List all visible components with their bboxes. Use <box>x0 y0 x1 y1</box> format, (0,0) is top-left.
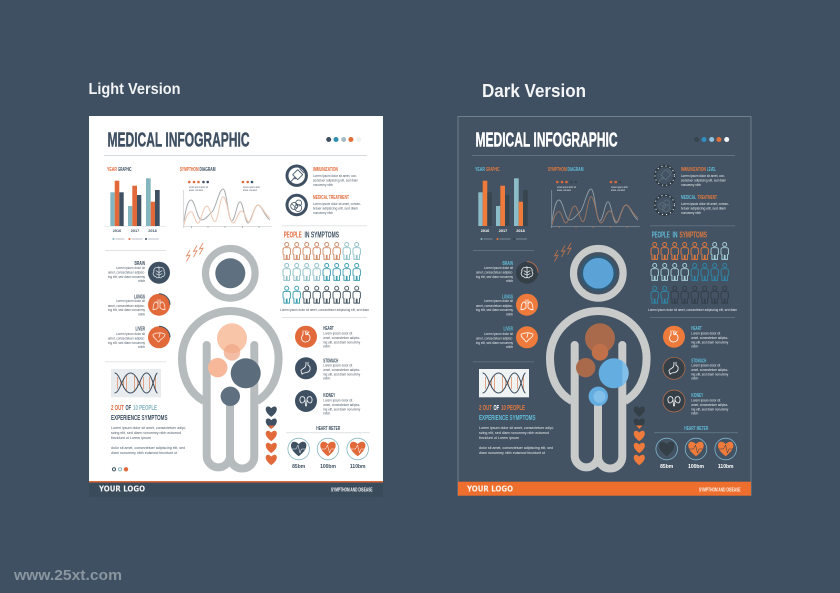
organ: heart: nibh <box>691 344 698 348</box>
icon: DNA card <box>479 369 529 397</box>
organ: liver: amet, consectetuer adipisc- <box>476 336 513 340</box>
icon: DNA card <box>111 369 161 397</box>
text: medical treatment: tetuer adipiscing elit, sed diam <box>313 206 358 210</box>
organ: heart: ing elit, sed diam nonummy <box>323 340 361 344</box>
organ: brain: ing elit, sed diam nonummy <box>476 275 513 279</box>
pictogram: people in symptoms <box>651 242 728 303</box>
organ: lungs: Lorem ipsum dolor sit <box>484 299 513 303</box>
organ: kidney: amet, consectetuer adipisc- <box>323 403 360 407</box>
organ: lungs: ing elit, sed diam nonummy <box>476 308 513 312</box>
heading: people in symptoms: SYMPTOMS <box>680 231 707 240</box>
text: immunization level: LEVEL <box>707 167 716 173</box>
line chart: symptom diagram: amet, consect <box>611 188 625 192</box>
organ: heart: HEART <box>691 326 702 332</box>
organ: liver: ing elit, sed diam nonummy <box>476 341 513 345</box>
organ: kidney: Lorem ipsum dolor sit <box>691 398 720 402</box>
text: medical treatment: TREATMENT <box>698 195 717 201</box>
organ: brain: nibh <box>138 279 145 283</box>
figure: human body <box>550 248 647 469</box>
heading: people in symptoms <box>652 231 707 240</box>
text: body paragraph: dolor sit amet, consectetuer adipiscing elit, sed <box>479 446 553 450</box>
organ: kidney <box>295 390 361 416</box>
organ: liver <box>108 326 170 349</box>
organ: heart: Lorem ipsum dolor sit <box>691 332 720 336</box>
text: 2 out of 10 people: EXPERIENCE SYMPTOMS <box>479 415 536 422</box>
text: 2 out of 10 people <box>111 405 168 422</box>
panel: light version poster <box>89 116 383 497</box>
text: body paragraph: scing elit, sed diam nonummy nibh euismod <box>479 431 549 435</box>
organ: lungs: amet, consectetuer adipisc- <box>108 304 145 308</box>
text: 2 out of 10 people: 2 OUT <box>479 405 492 412</box>
heart meter: 110bm <box>718 464 734 470</box>
text: medical treatment: MEDICAL TREATMENT <box>313 195 349 201</box>
bar chart: year graphic: 2017 <box>131 229 139 233</box>
bar chart: year graphic: GRAPHIC <box>118 167 132 173</box>
text: immunization level <box>681 167 726 187</box>
icon: immunization level <box>655 166 674 185</box>
organ: lungs: nibh <box>506 312 513 316</box>
organ: kidney: Lorem ipsum dolor sit <box>323 398 352 402</box>
line chart: symptom diagram: amet, consect <box>243 188 257 192</box>
icon: medical treatment <box>287 195 306 215</box>
text: immunization level: Lorem ipsum dolor sit amet, con- <box>681 174 725 178</box>
organ: heart <box>663 326 729 348</box>
text: body paragraph: Lorem ipsum dolor sit amet, consectetuer adipi- <box>111 426 187 430</box>
organ: lungs <box>476 294 538 316</box>
icons: heart column <box>266 406 277 465</box>
text: 2 out of 10 people: 2 OUT <box>111 405 124 412</box>
organ: liver: nibh <box>506 345 513 349</box>
heading: people in symptoms <box>284 231 339 240</box>
organ: brain <box>108 261 170 284</box>
organ: heart: nibh <box>323 344 330 348</box>
organ: lungs: LUNGS <box>134 294 145 300</box>
bar chart: year graphic <box>104 167 166 240</box>
footer bar: SYMPTHOM AND DISEASE <box>699 488 741 494</box>
heart meter: 85bm <box>660 464 674 470</box>
line chart: symptom diagram: SYMPTHOM <box>180 167 199 173</box>
text: immunization: nonummy nibh <box>313 183 333 187</box>
organ: liver <box>476 326 538 349</box>
heart meter: 100bm <box>688 464 704 470</box>
heart meter: HEART METER <box>316 426 340 432</box>
text: immunization level: sectetuer adipiscing elit, sed diam <box>681 178 726 182</box>
organ: brain: BRAIN <box>134 261 145 267</box>
organ: kidney: nibh <box>691 412 698 416</box>
heading: light version: Light Version <box>88 81 180 98</box>
organ: brain: Lorem ipsum dolor sit <box>116 266 145 270</box>
organ: lungs: LUNGS <box>502 294 513 300</box>
organ: kidney: amet, consectetuer adipisc- <box>691 403 728 407</box>
text: medical treatment: nonummy nibh <box>313 211 333 215</box>
organ: kidney: KIDNEY <box>323 393 335 399</box>
heart meter: 110bm <box>350 464 366 470</box>
organ: liver: ing elit, sed diam nonummy <box>108 341 145 345</box>
organ: stomach: ing elit, sed diam nonummy <box>323 372 361 376</box>
organ: lungs: ing elit, sed diam nonummy <box>108 308 145 312</box>
pagination dots <box>112 467 128 471</box>
text: medical treatment: Lorem ipsum dolor sit amet, consec- <box>681 202 729 206</box>
icon: lightning bolts <box>186 243 203 262</box>
title: MEDICAL INFOGRAPHIC <box>108 129 250 152</box>
text: body paragraph: scing elit, sed diam nonummy nibh euismod <box>111 431 181 435</box>
text: medical treatment: MEDICAL <box>681 195 696 201</box>
text: medical treatment: Lorem ipsum dolor sit amet, consec- <box>313 202 361 206</box>
text: medical treatment: tetuer adipiscing elit, sed diam <box>681 206 726 210</box>
text: 2 out of 10 people: OF <box>126 405 131 412</box>
icon: immunization <box>287 166 306 185</box>
organ: brain: amet, consectetuer adipisc- <box>476 270 513 274</box>
text: immunization: IMMUNIZATION <box>313 167 338 173</box>
line chart: symptom diagram: amet, consect <box>557 188 571 192</box>
line chart: symptom diagram: Lorem ipsum dolor <box>243 185 260 189</box>
text: people caption: Lorem ipsum dolor sit amet, consectetuer adipiscing elit, sed diam <box>280 308 369 312</box>
text: medical treatment <box>681 195 729 215</box>
organ: liver: nibh <box>138 345 145 349</box>
text: medical treatment: nonummy nibh <box>681 211 701 215</box>
footer bar: SYMPTHOM AND DISEASE <box>331 488 373 494</box>
icon: medical treatment <box>655 195 674 215</box>
bar chart: year graphic: 2018 <box>516 229 525 233</box>
text: 2 out of 10 people <box>479 405 536 422</box>
organ: liver: Lorem ipsum dolor sit <box>116 332 145 336</box>
organ: brain <box>476 261 538 284</box>
organ: brain: Lorem ipsum dolor sit <box>484 266 513 270</box>
heart meter: 85bm <box>292 464 306 470</box>
heading: dark version: Dark Version <box>482 80 586 101</box>
colour dots <box>326 137 361 142</box>
icon: lightning bolts <box>554 243 571 262</box>
organ: stomach: amet, consectetuer adipisc- <box>691 368 728 372</box>
organ: lungs: amet, consectetuer adipisc- <box>476 304 513 308</box>
organ: brain: nibh <box>506 279 513 283</box>
text: people caption: Lorem ipsum dolor sit amet, consectetuer adipiscing elit, sed diam <box>648 308 737 312</box>
organ: stomach <box>295 357 361 380</box>
line chart: symptom diagram <box>548 167 640 228</box>
organ: liver: amet, consectetuer adipisc- <box>108 336 145 340</box>
organ: heart: HEART <box>323 326 334 332</box>
bar chart: year graphic: 2016 <box>481 229 489 233</box>
heading: people in symptoms: IN <box>672 231 678 240</box>
line chart: symptom diagram: Lorem ipsum dolor sit <box>557 185 576 189</box>
text: immunization: Lorem ipsum dolor sit amet, con- <box>313 174 357 178</box>
text: immunization: sectetuer adipiscing elit, sed diam <box>313 178 358 182</box>
organ: brain: amet, consectetuer adipisc- <box>108 270 145 274</box>
heading: people in symptoms: PEOPLE <box>652 231 670 240</box>
text: 2 out of 10 people: EXPERIENCE SYMPTOMS <box>111 415 168 422</box>
title: MEDICAL INFOGRAPHIC <box>476 129 618 152</box>
line chart: symptom diagram: DIAGRAM <box>200 167 216 173</box>
footer bar: YOUR LOGO <box>98 484 145 494</box>
organ: kidney: ing elit, sed diam nonummy <box>691 407 729 411</box>
organ: stomach: nibh <box>691 376 698 380</box>
text: 2 out of 10 people: 10 PEOPLE <box>501 405 525 412</box>
organ: stomach: ing elit, sed diam nonummy <box>691 372 729 376</box>
bar chart: year graphic: 2016 <box>113 229 121 233</box>
text: 2 out of 10 people: 10 PEOPLE <box>133 405 157 412</box>
heart meter: 100bm <box>320 464 336 470</box>
organ: brain: BRAIN <box>502 261 513 267</box>
icons: heart column <box>634 406 645 465</box>
panel: dark version poster <box>458 116 751 496</box>
figure: human body <box>182 248 279 469</box>
organ: lungs <box>108 294 170 316</box>
heading: people in symptoms: PEOPLE <box>284 231 302 240</box>
text: 2 out of 10 people: OF <box>494 405 499 412</box>
text: body paragraph: dolor sit amet, consectetuer adipiscing elit, sed <box>111 446 185 450</box>
pictogram: people in symptoms <box>283 242 360 303</box>
text: immunization level: nonummy nibh <box>681 183 701 187</box>
bar chart: year graphic: GRAPHIC <box>486 167 500 173</box>
text: body paragraph <box>111 426 187 455</box>
text: body paragraph: diam nonummy nibh euismod tincidunt ut <box>111 451 177 455</box>
organ: stomach: STOMACH <box>323 358 338 364</box>
bar chart: year graphic <box>475 167 528 240</box>
bar chart: year graphic: 2017 <box>499 229 507 233</box>
organ: stomach: nibh <box>323 376 330 380</box>
organ: heart: Lorem ipsum dolor sit <box>323 332 352 336</box>
bar chart: year graphic: YEAR <box>475 167 485 173</box>
organ: brain: ing elit, sed diam nonummy <box>108 275 145 279</box>
line chart: symptom diagram: Lorem ipsum dolor sit <box>189 185 208 189</box>
organ: kidney: ing elit, sed diam nonummy <box>323 407 361 411</box>
watermark: www.25xt.com <box>13 568 122 584</box>
heart meter <box>286 426 370 470</box>
organ: liver: LIVER <box>504 327 513 333</box>
organ: lungs: Lorem ipsum dolor sit <box>116 299 145 303</box>
colour dots <box>694 137 729 142</box>
heart meter: HEART METER <box>684 426 708 432</box>
text: body paragraph: diam nonummy nibh euismod tincidunt ut <box>479 451 545 455</box>
organ: stomach: amet, consectetuer adipisc- <box>323 368 360 372</box>
footer bar: YOUR LOGO <box>466 484 513 494</box>
footer bar <box>89 481 383 497</box>
text: body paragraph <box>479 426 555 455</box>
line chart: symptom diagram: SYMPTHOM <box>548 167 567 173</box>
heading: people in symptoms: IN SYMPTOMS <box>304 231 339 240</box>
footer bar <box>458 482 751 496</box>
organ: stomach <box>663 357 729 380</box>
organ: kidney <box>663 390 729 416</box>
organ: liver: LIVER <box>136 327 145 333</box>
text: body paragraph: tincidunt ut Lorem ipsum <box>111 436 151 440</box>
text: body paragraph: tincidunt ut Lorem ipsum <box>479 436 519 440</box>
organ: heart <box>295 326 361 348</box>
bar chart: year graphic: 2018 <box>148 229 157 233</box>
text: immunization <box>313 167 358 187</box>
organ: liver: Lorem ipsum dolor sit <box>484 332 513 336</box>
organ: heart: amet, consectetuer adipisc- <box>323 336 360 340</box>
organ: stomach: Lorem ipsum dolor sit <box>323 364 352 368</box>
text: body paragraph: Lorem ipsum dolor sit amet, consectetuer adipi- <box>479 426 555 430</box>
organ: stomach: Lorem ipsum dolor sit <box>691 364 720 368</box>
line chart: symptom diagram: Lorem ipsum dolor <box>611 185 628 189</box>
heart meter <box>654 426 738 470</box>
organ: stomach: STOMACH <box>691 358 706 364</box>
organ: heart: ing elit, sed diam nonummy <box>691 340 729 344</box>
text: immunization level: IMMUNIZATION <box>681 167 706 173</box>
line chart: symptom diagram: DIAGRAM <box>568 167 584 173</box>
line chart: symptom diagram <box>180 167 272 228</box>
organ: heart: amet, consectetuer adipisc- <box>691 336 728 340</box>
bar chart: year graphic: YEAR <box>107 167 117 173</box>
organ: kidney: KIDNEY <box>691 393 703 399</box>
line chart: symptom diagram: amet, consect <box>189 188 203 192</box>
organ: lungs: nibh <box>138 312 145 316</box>
organ: kidney: nibh <box>323 412 330 416</box>
text: medical treatment <box>313 195 361 215</box>
